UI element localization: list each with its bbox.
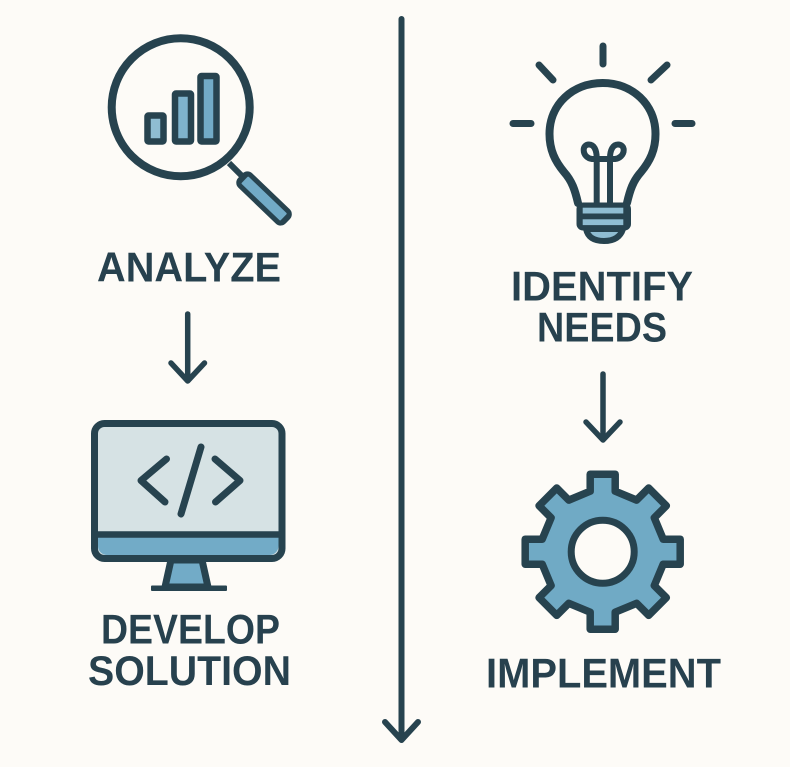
- heading: IDENTIFY NEEDS: [511, 263, 693, 351]
- heading: IMPLEMENT: IMPLEMENT: [486, 650, 721, 697]
- icon: light bulb: [513, 46, 692, 241]
- heading: IDENTIFY NEEDS: IDENTIFY: [511, 263, 693, 310]
- heading: DEVELOP SOLUTION: DEVELOP: [101, 605, 280, 652]
- heading: DEVELOP SOLUTION: SOLUTION: [88, 647, 291, 694]
- central vertical arrow: [385, 19, 418, 740]
- icon: magnifying glass with bar chart: [112, 38, 295, 228]
- heading: IDENTIFY NEEDS: NEEDS: [537, 304, 667, 351]
- icon: light rays: [513, 46, 692, 124]
- icon: monitor with code symbol: [94, 424, 282, 591]
- arrow: analyze to develop: [171, 314, 204, 381]
- icon: gear: [525, 474, 680, 629]
- heading: ANALYZE: ANALYZE: [97, 243, 281, 290]
- heading: DEVELOP SOLUTION: [88, 605, 291, 694]
- arrow: identify needs to implement: [586, 374, 620, 440]
